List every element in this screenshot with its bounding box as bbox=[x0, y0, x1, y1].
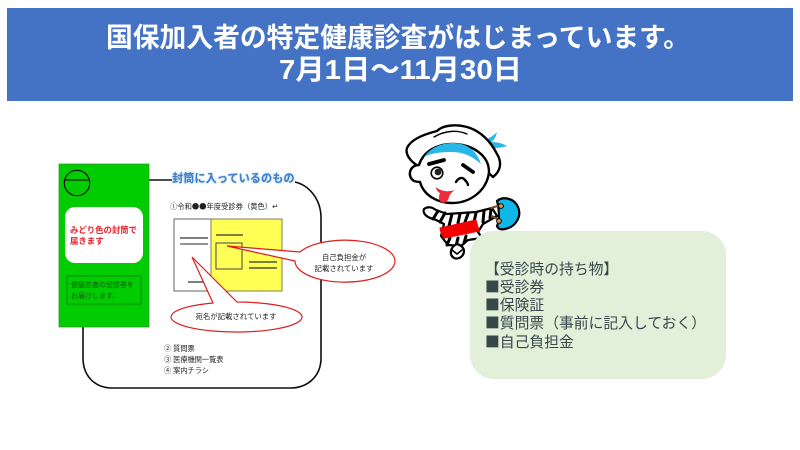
icon: mouth and tongue bbox=[436, 187, 455, 203]
other contents list: ② 質問票 bbox=[164, 344, 195, 353]
envelope contents illustration bbox=[59, 164, 395, 388]
callout: self-pay amount bbox=[227, 240, 395, 282]
green envelope: みどり色の封筒で bbox=[70, 225, 137, 235]
panel: items to bring: 【受診時の持ち物】 bbox=[485, 258, 618, 279]
icon: head bbox=[410, 144, 489, 203]
title banner: 国保加入者の特定健康診査がはじまっています。 bbox=[106, 22, 690, 53]
green envelope: 健康診査の受診券を bbox=[71, 280, 134, 289]
panel: items to bring: ■自己負担金 bbox=[485, 331, 574, 352]
icon: winking eye bbox=[456, 178, 468, 185]
ticket label: ①令和●●年度受診券（黄色）↵ bbox=[170, 202, 278, 212]
icon: body bbox=[424, 207, 497, 259]
ticket diagram bbox=[174, 219, 282, 291]
title banner: 7月1日〜11月30日 bbox=[279, 54, 522, 85]
green envelope bbox=[59, 164, 149, 327]
callout: self-pay amount: 記載されています bbox=[315, 264, 373, 273]
other contents list: ④ 案内チラシ bbox=[164, 366, 209, 375]
contents frame outline bbox=[83, 180, 321, 388]
green envelope: 届きます bbox=[70, 236, 104, 246]
heading: envelope contents: 封筒に入っているのもの bbox=[172, 171, 295, 185]
other contents list bbox=[164, 344, 224, 375]
other contents list: ③ 医療機関一覧表 bbox=[164, 355, 224, 364]
callout: address: 宛名が記載されています bbox=[195, 312, 277, 321]
icon: hat ribbon bbox=[478, 132, 507, 155]
title banner bbox=[7, 8, 793, 101]
icon: hat crown line bbox=[434, 131, 467, 137]
callout: self-pay amount: 自己負担金が bbox=[322, 253, 367, 262]
icon: left eyebrow bbox=[429, 160, 444, 164]
icon: fan racket bbox=[491, 198, 519, 229]
icon: headband bbox=[424, 143, 481, 164]
icon: open eye bbox=[431, 167, 443, 179]
panel: items to bring: ■受診券 bbox=[485, 276, 544, 297]
mascot character bbox=[407, 125, 519, 259]
callout: address bbox=[171, 257, 302, 332]
heading: envelope contents: 封筒に入っているのもの bbox=[172, 171, 295, 185]
panel: items to bring bbox=[470, 231, 726, 379]
panel: items to bring: ■質問票（事前に記入しておく） bbox=[485, 312, 706, 333]
panel: items to bring: ■保険証 bbox=[485, 294, 544, 315]
icon: hat bbox=[407, 125, 500, 177]
icon: right eyebrow bbox=[463, 165, 473, 172]
green envelope: お届けします。 bbox=[71, 292, 119, 300]
